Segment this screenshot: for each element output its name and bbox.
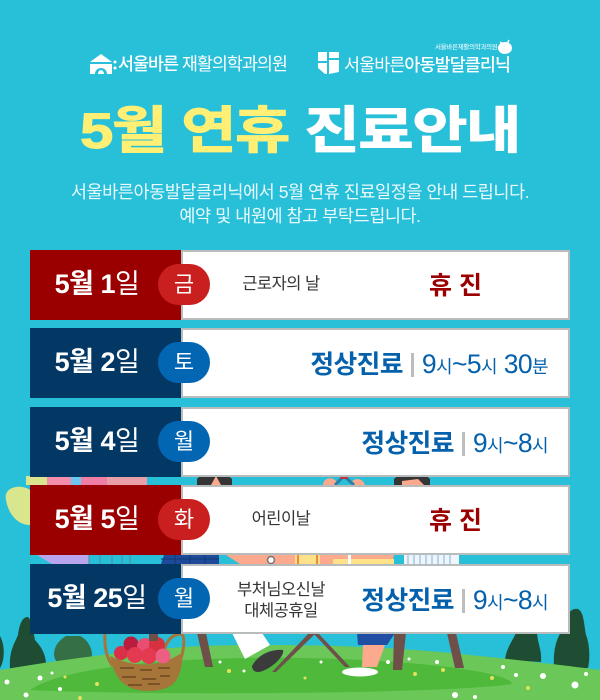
weekday badge (158, 421, 210, 462)
intro text (71, 182, 529, 226)
grass flowers (4, 658, 588, 699)
weekday badge: 토 (174, 350, 194, 375)
holiday name: 근로자의 날 (242, 275, 320, 293)
hours: 정상진료 9시~5시 30분 (310, 349, 548, 379)
icon: clinic mark (318, 52, 339, 74)
day panel (181, 564, 570, 634)
weekday badge (158, 342, 210, 383)
hours: 정상진료 9시~8시 (361, 428, 548, 458)
holiday name (237, 581, 325, 620)
holiday name: 어린이날 (252, 510, 310, 528)
title: 5월 연휴 진료안내 (80, 102, 520, 159)
weekday badge (158, 499, 210, 540)
logo: children's clinic: 서울바른아동발달클리닉 (344, 55, 510, 75)
closed status: 휴 진 (429, 272, 483, 300)
date (30, 407, 181, 477)
feet (232, 633, 395, 676)
weekday badge (158, 578, 210, 619)
schedule row: May 1 (30, 250, 570, 320)
icon: speech bubble (498, 40, 512, 54)
seated figure right (226, 474, 459, 564)
weekday badge (158, 264, 210, 305)
date (30, 485, 181, 555)
weekday badge: 월 (174, 586, 194, 611)
holiday name: 대체공휴일 (244, 602, 318, 620)
flower basket (105, 634, 184, 691)
date: 5월 2일 (55, 347, 139, 377)
schedule row: May 4 (30, 407, 570, 477)
schedule row: May 2 (30, 328, 570, 398)
weekday badge: 화 (174, 507, 194, 532)
schedule row: May 5 (30, 485, 570, 555)
balloons (6, 476, 147, 564)
text: 서울바른재활의학과의원 (435, 44, 497, 51)
yellow flowers (64, 668, 530, 700)
date: 5월 4일 (55, 426, 139, 456)
icon: clinic emblem (90, 54, 116, 74)
logo: children's clinic (318, 40, 512, 75)
day panel (181, 485, 570, 555)
closed status: 휴 진 (429, 507, 483, 535)
weekday badge: 금 (174, 272, 194, 297)
date (30, 564, 181, 634)
trees (0, 609, 589, 670)
seated figure left (161, 474, 232, 564)
date (30, 328, 181, 398)
day panel (181, 328, 570, 398)
logo: rehabilitation clinic: 서울바른 재활의학과의원 (118, 54, 287, 74)
holiday name: 부처님오신날 (237, 581, 325, 599)
intro text: 예약 및 내원에 참고 부탁드립니다. (179, 206, 421, 226)
schedule row: May 25 (30, 564, 570, 634)
table and chair legs (149, 633, 464, 672)
date (30, 250, 181, 320)
intro text: 서울바른아동발달클리닉에서 5월 연휴 진료일정을 안내 드립니다. (71, 182, 529, 202)
weekday badge: 월 (174, 429, 194, 454)
hours: 정상진료 9시~8시 (361, 585, 548, 615)
date: 5월 1일 (55, 269, 139, 299)
date: 5월 25일 (47, 583, 147, 613)
day panel (181, 250, 570, 320)
header logos (90, 40, 512, 75)
date: 5월 5일 (55, 504, 139, 534)
grass hill (0, 645, 600, 700)
day panel (181, 407, 570, 477)
